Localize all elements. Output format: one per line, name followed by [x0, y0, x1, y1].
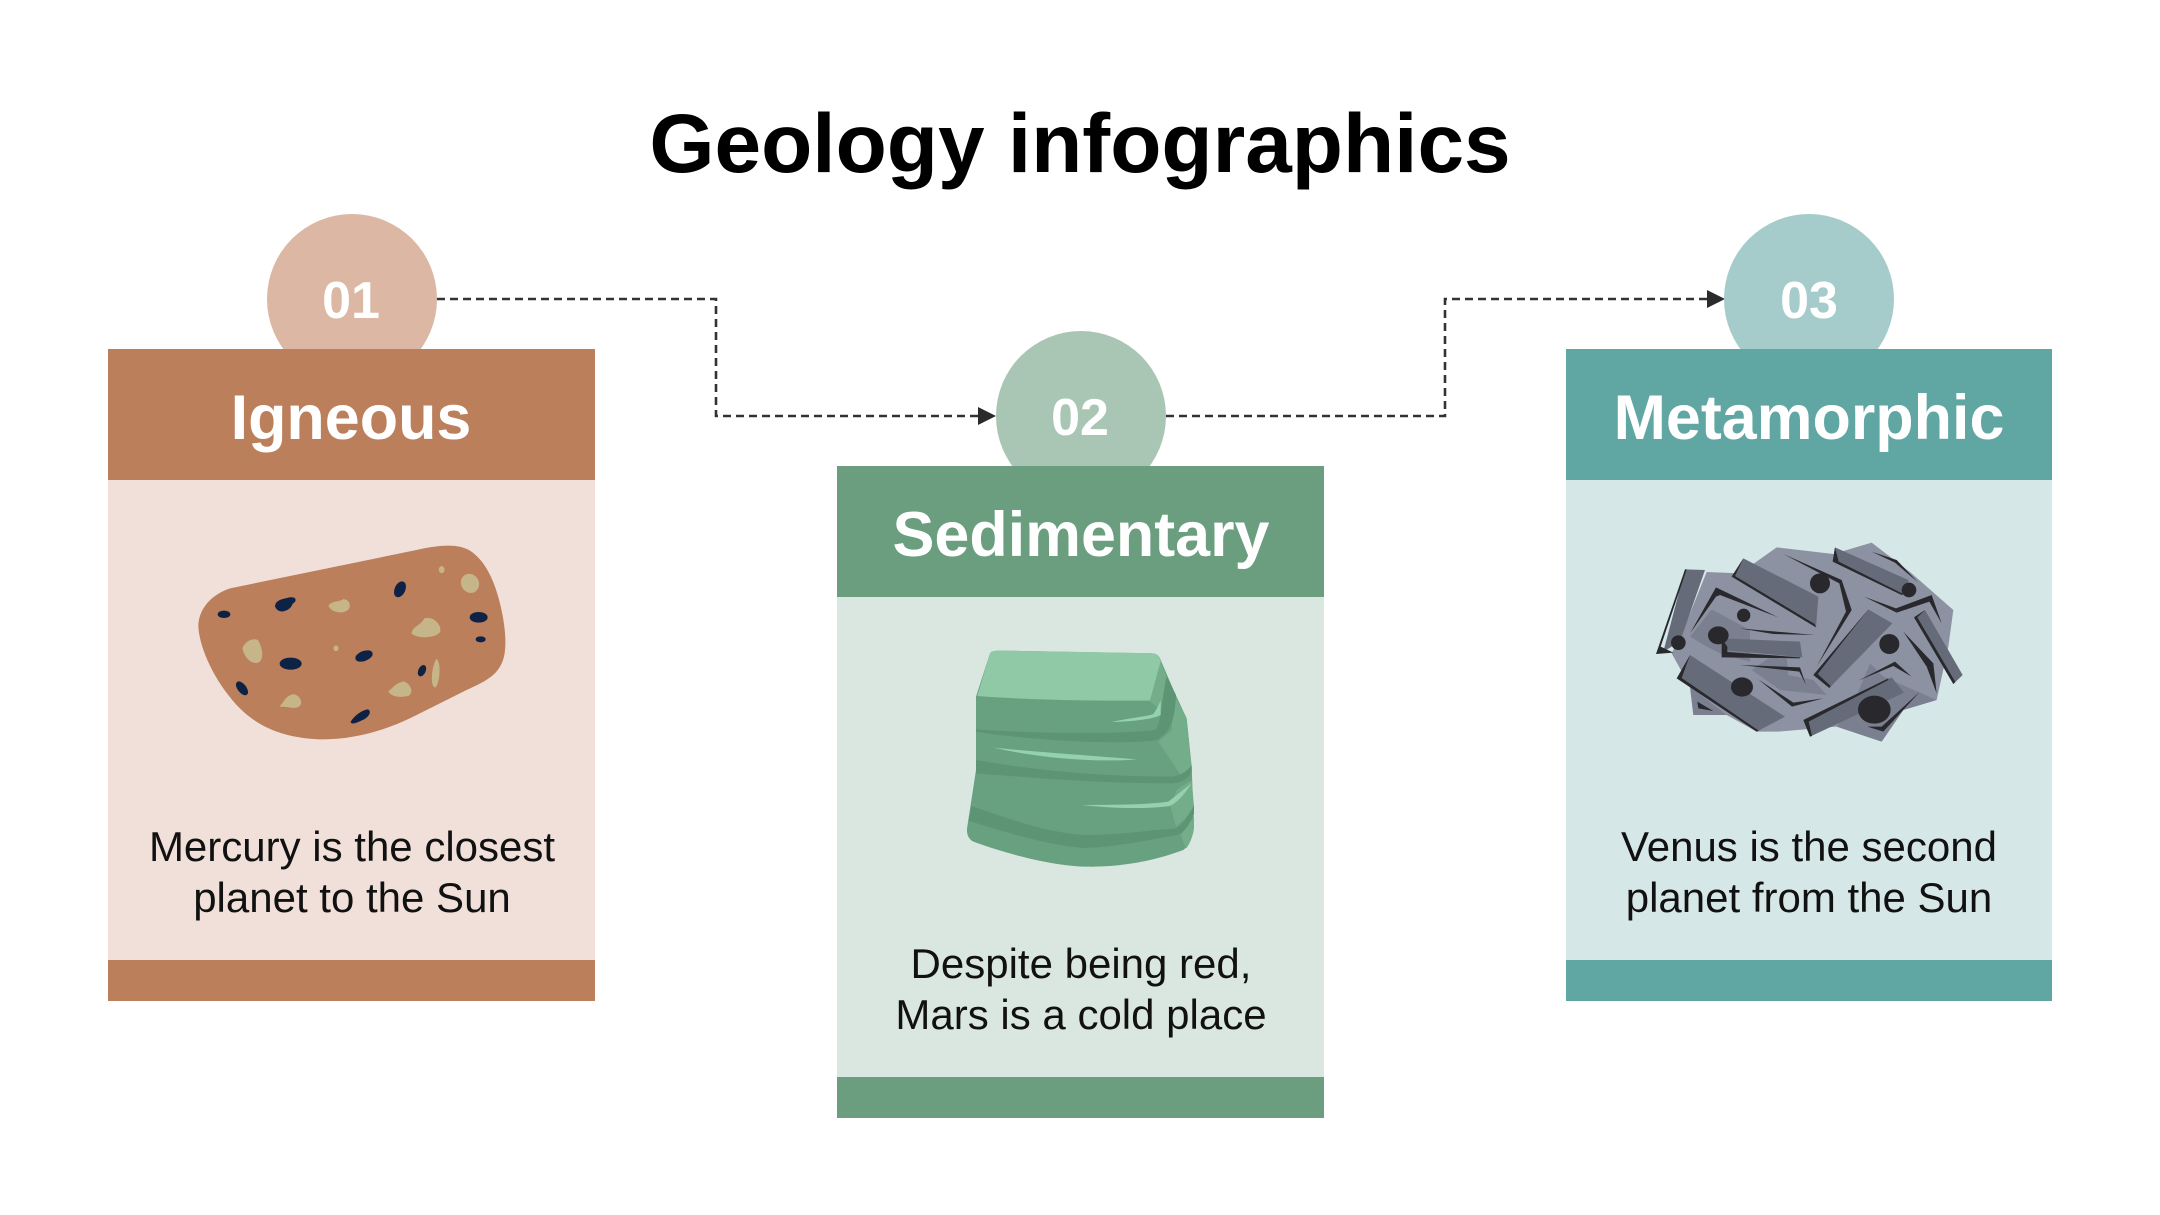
header sedimentary: Sedimentary — [893, 500, 1270, 570]
icon: sedimentary rock — [967, 651, 1194, 867]
number badge 02 — [996, 331, 1166, 501]
panel: igneous — [108, 214, 595, 1001]
text: metamorphic description: Venus is the second — [1621, 823, 1997, 870]
arrow: 01 to 02 — [437, 299, 996, 425]
text: igneous description — [149, 823, 555, 921]
card body sedimentary — [837, 597, 1324, 1078]
footer band sedimentary — [837, 1077, 1324, 1118]
footer band igneous — [108, 960, 595, 1001]
card body igneous — [108, 480, 595, 961]
header metamorphic — [1566, 349, 2052, 480]
number badge 03: 03 — [1780, 272, 1838, 330]
icon: metamorphic rock — [1656, 543, 1963, 742]
header igneous — [108, 349, 595, 480]
header sedimentary — [837, 466, 1324, 597]
text: sedimentary description — [895, 940, 1267, 1038]
arrow: 02 to 03 — [1166, 290, 1725, 416]
text: sedimentary description: Despite being red, — [911, 940, 1251, 987]
header metamorphic: Metamorphic — [1614, 383, 2004, 453]
panel: metamorphic — [1566, 214, 2052, 1001]
text: metamorphic description: planet from the Sun — [1626, 874, 1992, 921]
number badge 03 — [1724, 214, 1894, 384]
text: metamorphic description — [1621, 823, 1997, 921]
title: Geology infographics — [649, 96, 1511, 190]
footer band metamorphic — [1566, 960, 2052, 1001]
header igneous: Igneous — [231, 383, 471, 453]
number badge 01 — [267, 214, 437, 384]
number badge 01: 01 — [322, 272, 380, 330]
text: igneous description: Mercury is the closest — [149, 823, 555, 870]
text: sedimentary description: Mars is a cold place — [895, 991, 1267, 1038]
card body metamorphic — [1566, 480, 2052, 961]
icon: igneous rock — [198, 546, 505, 739]
text: igneous description: planet to the Sun — [193, 874, 511, 921]
panel: sedimentary — [837, 331, 1324, 1118]
number badge 02: 02 — [1051, 389, 1109, 447]
